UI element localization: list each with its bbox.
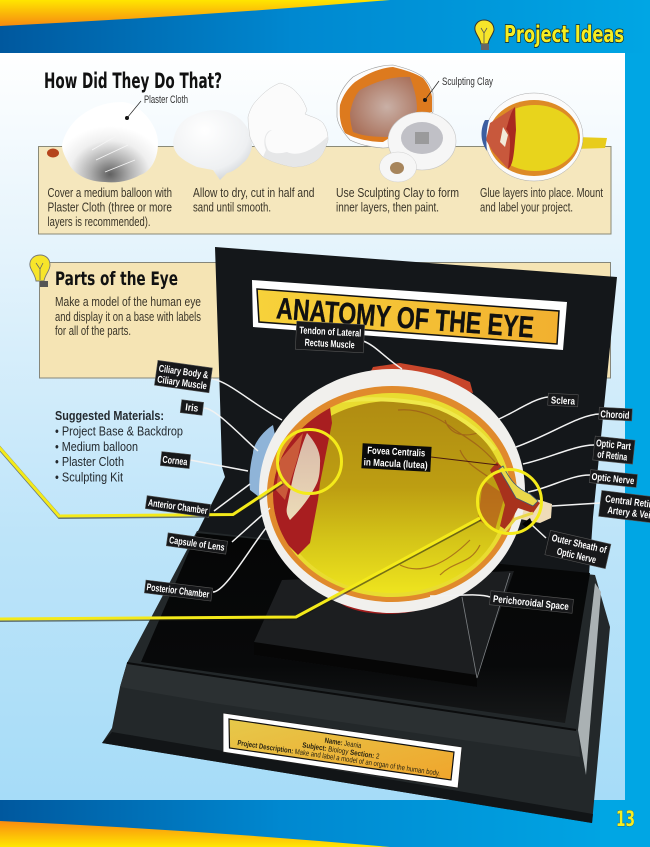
text: project description: Make a model of the human eye bbox=[55, 295, 201, 309]
label: sclera: Sclera bbox=[551, 395, 576, 408]
label: sculpting clay: Sculpting Clay bbox=[442, 76, 493, 88]
text: suggested materials bbox=[55, 409, 183, 484]
page number: 13 bbox=[616, 807, 635, 831]
label: optic part of retina bbox=[593, 436, 635, 464]
label: ciliary body: Ciliary Muscle bbox=[156, 375, 208, 392]
caption: step 2: Allow to dry, cut in half and bbox=[193, 186, 315, 200]
label: choroid bbox=[599, 407, 632, 422]
photo: sculpting clay layers bbox=[337, 65, 456, 182]
caption: step 1: layers is recommended). bbox=[48, 215, 150, 229]
label: optic part of retina: of Retina bbox=[597, 449, 628, 464]
label: ciliary body: Ciliary Body & bbox=[158, 364, 209, 381]
label: outer sheath: Optic Nerve bbox=[556, 546, 597, 566]
extraocular muscle bbox=[370, 363, 473, 393]
header band bbox=[0, 0, 650, 53]
section title: Project Ideas bbox=[475, 20, 624, 50]
caption: step 2 bbox=[193, 186, 315, 214]
icon: light bulb header bbox=[475, 20, 494, 50]
text: project description: and display it on a base with labels bbox=[55, 310, 201, 324]
panel: how-to steps bbox=[38, 146, 611, 234]
title sign: anatomy of the eye: ANATOMY OF THE EYE bbox=[275, 292, 535, 345]
label: central retinal artery bbox=[599, 490, 650, 524]
text: suggested materials: • Medium balloon bbox=[55, 440, 138, 454]
label: fovea centralis: Fovea Centralis bbox=[367, 445, 426, 460]
label: cornea bbox=[160, 452, 191, 469]
label: optic nerve bbox=[589, 470, 637, 487]
label: choroid: Choroid bbox=[600, 409, 630, 422]
text: project description: for all of the parts. bbox=[55, 324, 131, 338]
panel: parts of the eye bbox=[40, 262, 610, 378]
label: fovea centralis: in Macula (lutea) bbox=[363, 457, 428, 472]
label: ciliary body bbox=[154, 360, 212, 393]
label: perichoroidal space bbox=[489, 591, 574, 613]
text: suggested materials: Suggested Materials: bbox=[55, 409, 164, 423]
text: suggested materials: • Project Base & Backdrop bbox=[55, 424, 183, 438]
name plate: Subject: Biology Section: 2 bbox=[302, 740, 380, 761]
footer band bbox=[0, 800, 650, 847]
caption: step 3: Use Sculpting Clay to form bbox=[336, 186, 459, 200]
cornea bbox=[249, 425, 280, 500]
label: optic part of retina: Optic Part bbox=[595, 438, 632, 453]
text: suggested materials: • Sculpting Kit bbox=[55, 470, 123, 484]
caption: step 1: Cover a medium balloon with bbox=[48, 186, 172, 200]
icon: light bulb bbox=[30, 255, 50, 287]
label: capsule of lens bbox=[166, 533, 228, 554]
name plate: Project Description: Make and label a model of an organ of the human body. bbox=[237, 738, 441, 778]
retina layer bbox=[273, 393, 511, 597]
caption: step 1 bbox=[48, 186, 172, 229]
sclera bbox=[259, 369, 525, 613]
photo: plaster balloon bbox=[47, 101, 158, 182]
project base bbox=[102, 531, 610, 823]
label: iris bbox=[180, 400, 204, 415]
text: project description bbox=[55, 295, 201, 338]
backdrop board bbox=[141, 247, 617, 662]
crystalline lens bbox=[287, 433, 320, 520]
label: optic nerve: Optic Nerve bbox=[591, 472, 635, 487]
heading: How Did They Do That: How Did They Do That? bbox=[44, 69, 222, 93]
leader line: fovea bbox=[431, 457, 498, 465]
caption: step 3 bbox=[336, 186, 459, 214]
caption: step 4 bbox=[480, 186, 603, 214]
label: outer sheath bbox=[545, 530, 611, 569]
label: cornea: Cornea bbox=[162, 455, 188, 468]
heading: parts of the eye: Parts of the Eye bbox=[55, 268, 178, 290]
optic nerve stub bbox=[515, 497, 552, 523]
label: anterior chamber bbox=[145, 496, 211, 517]
caption: step 2: sand until smooth. bbox=[193, 200, 271, 214]
label: perichoroidal space: Perichoroidal Space bbox=[492, 594, 570, 613]
label: tendon: Tendon of Lateral bbox=[299, 325, 362, 340]
name plate: Name: Jeania bbox=[324, 736, 363, 750]
label: fovea centralis bbox=[361, 443, 432, 472]
leader lines bbox=[190, 341, 600, 597]
caption: step 1: Plaster Cloth (three or more bbox=[48, 200, 172, 214]
optic disc detail bbox=[490, 462, 540, 532]
label: tendon bbox=[295, 321, 365, 353]
name plate bbox=[223, 713, 462, 788]
caption: step 4: and label your project. bbox=[480, 200, 573, 214]
text: suggested materials: • Plaster Cloth bbox=[55, 455, 124, 469]
caption: step 4: Glue layers into place. Mount bbox=[480, 186, 603, 200]
label: outer sheath: Outer Sheath of bbox=[550, 533, 608, 556]
photo: finished eye model bbox=[482, 93, 607, 181]
label: posterior chamber bbox=[144, 580, 212, 601]
eye model bbox=[249, 363, 552, 614]
callout lines and circles bbox=[0, 430, 542, 620]
step captions bbox=[48, 186, 603, 229]
label: anterior chamber: Anterior Chamber bbox=[147, 498, 208, 517]
label: plaster cloth: Plaster Cloth bbox=[144, 94, 188, 106]
title sign: anatomy of the eye bbox=[252, 280, 567, 350]
label: posterior chamber: Posterior Chamber bbox=[146, 582, 210, 601]
label: capsule of lens: Capsule of Lens bbox=[168, 535, 226, 554]
caption: step 3: inner layers, then paint. bbox=[336, 200, 439, 214]
labels on the model bbox=[144, 321, 650, 613]
vitreous chamber bbox=[268, 399, 506, 593]
photo: cut shell halves bbox=[173, 83, 328, 180]
choroid layer bbox=[267, 386, 517, 602]
label: iris: Iris bbox=[185, 402, 199, 415]
label: tendon: Rectus Muscle bbox=[304, 338, 355, 351]
